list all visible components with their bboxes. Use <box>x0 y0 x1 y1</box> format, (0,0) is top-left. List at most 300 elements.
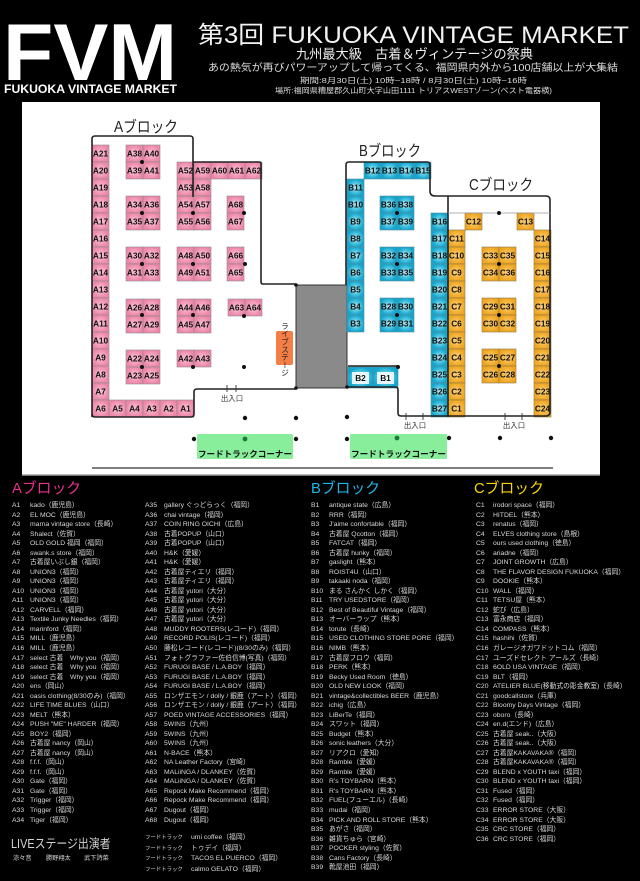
block B booths: B20 <box>432 285 447 295</box>
shop list C1-C36: ELVES clothing store（島根） <box>493 531 584 538</box>
block A booths: A23 <box>127 371 142 381</box>
block B booths: B1 <box>380 373 391 383</box>
shop list A1-A34: Trigger（福岡） <box>30 797 78 804</box>
block C booths: C9 <box>451 268 462 278</box>
block C booths: C27 <box>500 353 515 363</box>
shop list A1-A34: A5 <box>12 540 20 547</box>
shop list B1-B39: B8 <box>311 569 319 576</box>
block B booths: B21 <box>432 302 447 312</box>
shop list C1-C36: oboro（長崎） <box>493 712 538 719</box>
food truck list: トゥデイ（福岡） <box>191 845 245 852</box>
shop list B1-B39: B7 <box>311 559 319 566</box>
block A booths: A20 <box>93 166 108 176</box>
block C booths: C23 <box>535 387 550 397</box>
block C booths: C25 <box>483 353 498 363</box>
block A booths: A37 <box>144 217 159 227</box>
food truck list: フードトラック <box>145 835 183 841</box>
shop list A35-A68: A59 <box>145 731 157 738</box>
shop list B1-B39: R's TOYBARN（熊本） <box>329 788 400 795</box>
shop list B1-B39: リアクロ（愛知） <box>329 750 383 757</box>
block A booths: A26 <box>127 303 142 313</box>
block A booths: A59 <box>195 166 210 176</box>
food truck list: フードトラック <box>145 867 183 873</box>
block C booths: C22 <box>535 370 550 380</box>
shop list A1-A34: A23 <box>12 712 24 719</box>
shop list A1-A34: CARVELL（福岡） <box>30 607 88 614</box>
block B booths: B4 <box>350 302 361 312</box>
shop list B1-B39: USED CLOTHING STORE PORE（福岡） <box>329 635 458 642</box>
shop list A1-A34: A7 <box>12 559 20 566</box>
shop list A1-A34: A28 <box>12 759 24 766</box>
food truck list <box>145 833 282 873</box>
block C booths: C18 <box>535 302 550 312</box>
block A booths: A7 <box>95 387 106 397</box>
shop list B1-B39: takaaki noda（福岡） <box>329 578 395 585</box>
shop list A35-A68: A52 <box>145 664 157 671</box>
shop list A35-A68: 古着POPUP（山口） <box>164 531 229 538</box>
shop list C1-C36: Bloomy Days Vintage（福岡） <box>493 702 585 709</box>
block A booths: A51 <box>195 268 210 278</box>
shop list B1-B39 <box>311 501 458 871</box>
shop list A35-A68: Dugout（福岡） <box>164 807 213 814</box>
block A booths: A29 <box>144 320 159 330</box>
live stage performers: 勝野翔太 <box>46 855 71 862</box>
shop list B1-B39: B22 <box>311 702 323 709</box>
block A booths: A65 <box>228 268 243 278</box>
dates: 期間:8月30日(土) 10時~18時 / 8月30日(土) 10時~16時 <box>300 75 527 85</box>
shop list A1-A34: oasis clothing(8/30のみ)（福岡） <box>30 693 130 700</box>
shop list C1-C36: C18 <box>476 664 488 671</box>
shop list B1-B39: B21 <box>311 693 323 700</box>
shop list B1-B39: vintage&collectibles BEER（鹿児島） <box>329 693 443 700</box>
block B booths: B18 <box>432 251 447 261</box>
shop list C1-C36: irodori space（福岡） <box>493 502 559 509</box>
food truck corner left <box>197 434 293 459</box>
block B booths: B38 <box>398 200 413 210</box>
shop list A35-A68: A62 <box>145 759 157 766</box>
block A booths: A60 <box>212 166 227 176</box>
food truck list: calmo GELATO（福岡） <box>191 866 265 873</box>
block A booths: A33 <box>144 268 159 278</box>
shop list B1-B39: B27 <box>311 750 323 757</box>
block B booths: B24 <box>432 353 447 363</box>
shop list A1-A34: A11 <box>12 597 24 604</box>
shop list B1-B39: Ramble（愛媛） <box>329 759 380 766</box>
food truck list: フードトラック <box>145 856 183 862</box>
shop list A1-A34: A18 <box>12 664 24 671</box>
shop list C1-C36: C12 <box>476 607 488 614</box>
shop list A1-A34: Gate（福岡） <box>30 788 72 795</box>
shop list A35-A68: COIN RING OICHI（広島） <box>164 521 248 528</box>
block C booths <box>448 213 551 417</box>
entrance 3: 出入口 <box>503 421 525 430</box>
block A booths: A3 <box>146 404 157 414</box>
shop list A35-A68: A65 <box>145 788 157 795</box>
block A booths: A50 <box>195 251 210 261</box>
shop list A1-A34: MELT（熊本） <box>30 712 75 719</box>
entrance 1: 出入口 <box>221 394 243 403</box>
event header <box>3 8 629 98</box>
shop list C1-C36: 古着屋KAKAVAKA®（福岡） <box>493 759 581 766</box>
food truck corner left: フードトラックコーナー <box>198 449 292 459</box>
shop list A35-A68: A66 <box>145 797 157 804</box>
shop list A35-A68: 5WINS（九州） <box>164 740 213 747</box>
shop list A1-A34: A32 <box>12 797 24 804</box>
shop list A1-A34: A33 <box>12 807 24 814</box>
shop list B1-B39: NIMB（熊本） <box>329 645 373 652</box>
block A booths: A32 <box>144 251 159 261</box>
shop list A35-A68: A40 <box>145 550 157 557</box>
shop list B1-B39: torute（長崎） <box>329 626 374 633</box>
block B booths: B8 <box>350 234 361 244</box>
shop list A35-A68: 5WINS（九州） <box>164 721 213 728</box>
shop list B1-B39: FATCAT（福岡） <box>329 540 381 547</box>
shop list A35-A68: 古着屋ティエリ（福岡） <box>164 569 238 576</box>
block C heading: Cブロック <box>469 175 533 194</box>
shop list A35-A68: FURUGI BASE / L.A.BOY（福岡） <box>164 664 269 671</box>
block A booths: A21 <box>93 149 108 159</box>
shop list B1-B39: ROIST4U（山口） <box>329 569 386 576</box>
shop list B1-B39: B4 <box>311 531 319 538</box>
shop list B1-B39: B39 <box>311 864 323 871</box>
shop list B1-B39: B29 <box>311 769 323 776</box>
shop list A35-A68: 古着屋 yutori（大分） <box>164 597 230 604</box>
shop list B1-B39: B5 <box>311 540 319 547</box>
food truck corner right: フードトラックコーナー <box>351 449 446 459</box>
shop list A35-A68: A50 <box>145 645 157 652</box>
block A booths: A16 <box>93 234 108 244</box>
block C booths: C19 <box>535 319 550 329</box>
shop list A35-A68: A49 <box>145 635 157 642</box>
block C booths: C6 <box>451 319 462 329</box>
shop list C1-C36: C2 <box>476 512 485 519</box>
shop list A1-A34: ens（岡山） <box>30 683 68 690</box>
shop list A1-A34: A27 <box>12 750 24 757</box>
shop list A35-A68: A48 <box>145 626 157 633</box>
shop list A1-A34: A3 <box>12 521 20 528</box>
block B booths: B15 <box>415 166 431 176</box>
block C booths: C2 <box>451 387 462 397</box>
logo: FVM: FUKUOKA VINTAGE MARKET <box>4 82 178 96</box>
shop list A1-A34: f.f.f.（岡山） <box>30 769 69 776</box>
shop list A35-A68: gallery ぐっどらっく（福岡） <box>164 502 254 509</box>
shop list A1-A34: A31 <box>12 788 24 795</box>
block A booths: A43 <box>195 354 210 364</box>
block C booths: C15 <box>535 251 550 261</box>
shop list C1-C36: WALL（福岡） <box>493 588 538 595</box>
shop list B1-B39: B24 <box>311 721 323 728</box>
shop list A35-A68: A43 <box>145 578 157 585</box>
shop list A35-A68: H&K（愛媛） <box>164 550 205 557</box>
shop list A35-A68: A35 <box>145 502 157 509</box>
block C booths: C31 <box>500 302 515 312</box>
shop list C1-C36: BLT（福岡） <box>493 674 532 681</box>
shop list B1-B39: B9 <box>311 578 319 585</box>
shop list C1-C36: C1 <box>476 502 485 509</box>
block A booths: A63 <box>229 303 244 313</box>
block A booths: A15 <box>93 251 108 261</box>
block A booths: A22 <box>127 354 142 364</box>
shop list A35-A68: RECORD POLIS(レコード)（福岡） <box>164 635 274 642</box>
shop list A35-A68: N-BACE（熊本） <box>164 750 217 757</box>
block A booths: A42 <box>178 354 193 364</box>
shop list B1-B39: Budget（熊本） <box>329 731 378 738</box>
shop list B1-B39: B28 <box>311 759 323 766</box>
shop list A35-A68: A67 <box>145 807 157 814</box>
shop list B1-B39: TRY USEDSTORE（福岡） <box>329 597 414 604</box>
shop list A35-A68: Repock Make Recommend（福岡） <box>164 788 273 795</box>
block A booths: A28 <box>144 303 159 313</box>
entrance 2: 出入口 <box>404 421 426 430</box>
shop list A1-A34: EL MOC（鹿児島） <box>30 512 90 519</box>
shop list B1-B39: B31 <box>311 788 323 795</box>
shop list B1-B39: R's TOYBARN（熊本） <box>329 778 400 785</box>
block C booths: C35 <box>500 251 515 261</box>
shop list C1-C36: C28 <box>476 759 488 766</box>
shop list C1-C36: C13 <box>476 616 488 623</box>
shop list A35-A68: chai vintage（福岡） <box>164 512 227 519</box>
shop list A35-A68: フォトグラファー佐伯信博(写真)（福岡） <box>164 654 291 662</box>
shop list C1-C36: C11 <box>476 597 488 604</box>
shop list A1-A34: A6 <box>12 550 20 557</box>
shop list A1-A34: BOY2（福岡） <box>30 731 75 738</box>
shop list A35-A68: MALiiNGA / DLANKEY（佐賀） <box>164 769 260 776</box>
block C booths: C1 <box>451 404 462 414</box>
shop list C1-C36: C30 <box>476 778 488 785</box>
block A booths: A48 <box>178 251 193 261</box>
block A booths: A40 <box>144 149 159 159</box>
block C booths: C33 <box>483 251 498 261</box>
shop list C1-C36: C34 <box>476 817 488 824</box>
shop list C1-C36: C32 <box>476 797 488 804</box>
food truck list: TACOS EL PUERCO（福岡） <box>191 855 282 862</box>
block C booths: C16 <box>535 268 550 278</box>
block A booths: A12 <box>93 302 108 312</box>
shop list A1-A34: A16 <box>12 645 24 652</box>
block C booths: C36 <box>500 268 515 278</box>
shop list B1-B39: 古着屋 hunky（福岡） <box>329 550 397 557</box>
shop list C1-C36: C22 <box>476 702 488 709</box>
live stage <box>276 322 293 377</box>
shop list A1-A34: Trigger（福岡） <box>30 807 78 814</box>
shop list C1-C36: C20 <box>476 683 488 690</box>
shop list A35-A68: 5WINS（九州） <box>164 731 213 738</box>
shop list A1-A34: 古着屋 nancy（岡山） <box>30 750 98 757</box>
shop list A1-A34: A17 <box>12 654 24 662</box>
block C booths: C11 <box>449 234 464 244</box>
block B heading: Bブロック <box>359 141 421 160</box>
shop list A35-A68: A57 <box>145 712 157 719</box>
block A booths: A53 <box>178 183 193 193</box>
shop list A1-A34: swank.s store（福岡） <box>30 550 99 557</box>
block C booths: C17 <box>535 285 550 295</box>
shop list A35-A68: POED VINTAGE ACCESSORIES（福岡） <box>164 712 292 719</box>
shop list B1-B39: 古着屋 Qcotton（福岡） <box>329 531 402 538</box>
block C booths: C28 <box>500 370 515 380</box>
shop list A35-A68: 古着屋 yutori（大分） <box>164 607 230 614</box>
block A booths: A14 <box>93 268 108 278</box>
shop list C1-C36: goodcallstore（兵庫） <box>493 693 561 700</box>
shop list A35-A68: A64 <box>145 778 157 785</box>
shop list A35-A68: 藤松レコード(レコード)(8/30のみ)（福岡） <box>164 645 295 652</box>
shop list A35-A68: A54 <box>145 683 157 690</box>
subtitle: 九州最大級 古着＆ヴィンテージの祭典 <box>296 46 533 62</box>
tagline: あの熱気が再びパワーアップして帰ってくる、福岡県内外から100店舗以上が大集結 <box>208 61 618 74</box>
entrance 1 <box>221 385 243 403</box>
block A booths: A49 <box>178 268 193 278</box>
live stage performers: 武下詩菜 <box>84 855 109 862</box>
block C booths: C24 <box>535 404 550 414</box>
shop list C1-C36: Fused（福岡） <box>493 797 539 804</box>
block A booths: A46 <box>195 303 210 313</box>
block A booths: A2 <box>163 404 174 414</box>
shop list A1-A34: Gate（福岡） <box>30 778 72 785</box>
shop list B1-B39: B26 <box>311 740 323 747</box>
shop list C1-C36: 古着屋 seak..（大阪） <box>493 731 561 738</box>
block B booths: B25 <box>432 370 447 380</box>
shop list B1-B39: Best of Beautiful Vintage（福岡） <box>329 607 431 614</box>
block A booths: A30 <box>127 251 142 261</box>
shop list A1-A34: A20 <box>12 683 24 690</box>
shop list A35-A68: A36 <box>145 512 157 519</box>
shop list C1-C36: CRC STORE（福岡） <box>493 826 560 833</box>
shop list A1-A34: A15 <box>12 635 24 642</box>
block B booths: B26 <box>432 387 447 397</box>
shop list C1-C36: 富永商店（福岡） <box>493 616 547 623</box>
shop list C1-C36: ERROR STORE（大阪） <box>493 817 570 824</box>
block A booths: A27 <box>127 320 142 330</box>
shop list C1-C36: C14 <box>476 626 488 633</box>
block B booths: B22 <box>432 319 447 329</box>
shop list C1-C36: Fused（福岡） <box>493 788 539 795</box>
block A booths: A34 <box>127 200 142 210</box>
shop list A1-A34: A4 <box>12 531 20 538</box>
shop list B1-B39: Ramble（愛媛） <box>329 769 380 776</box>
shop list B1-B39: B6 <box>311 550 319 557</box>
shop list A1-A34: UNION3（福岡） <box>30 588 83 595</box>
shop list C1-C36: ATELIER BLUE(移動式の彫金教室)（長崎） <box>493 683 627 690</box>
heading: B block list: Bブロック <box>311 481 380 497</box>
shop list A1-A34: A24 <box>12 721 24 728</box>
block A booths: A36 <box>144 200 159 210</box>
shop list A1-A34: select 古着 Why you（福岡） <box>30 674 124 681</box>
block B booths: B17 <box>432 234 447 244</box>
shop list C1-C36: C16 <box>476 645 488 652</box>
shop list B1-B39: B14 <box>311 626 323 633</box>
shop list A1-A34: 古着屋 nancy（岡山） <box>30 740 98 747</box>
block A booths: A9 <box>95 353 106 363</box>
shop list B1-B39: B37 <box>311 845 323 852</box>
block B booths: B39 <box>398 217 413 227</box>
shop list B1-B39: B18 <box>311 664 323 671</box>
shop list B1-B39: B12 <box>311 607 323 614</box>
block A booths: A64 <box>246 303 261 313</box>
block C booths: C12 <box>466 217 481 227</box>
shop list C1-C36: C27 <box>476 750 488 757</box>
shop list B1-B39: B19 <box>311 674 323 681</box>
shop list A35-A68: A41 <box>145 559 157 566</box>
block A booths: A13 <box>93 285 108 295</box>
block A booths: A55 <box>178 217 193 227</box>
venue map panel <box>22 102 600 476</box>
block B booths: B37 <box>381 217 396 227</box>
shop list A1-A34: marinford（福岡） <box>30 626 86 633</box>
block C booths: C26 <box>483 370 498 380</box>
block B booths: B34 <box>398 251 413 261</box>
shop list A35-A68: A38 <box>145 531 157 538</box>
block B booths: B3 <box>350 319 361 329</box>
block A booths: A68 <box>228 200 243 210</box>
block C booths: C5 <box>451 336 462 346</box>
shop list B1-B39: B16 <box>311 645 323 652</box>
block A booths: A38 <box>127 149 142 159</box>
shop list B1-B39: FUEL(フューエル)（長崎） <box>329 797 412 804</box>
block A booths: A6 <box>95 404 106 414</box>
block C booths: C8 <box>451 285 462 295</box>
block B booths: B2 <box>355 373 366 383</box>
block B booths: B29 <box>381 319 396 329</box>
shop list A35-A68: NA Leather Factory（宮崎） <box>164 759 250 766</box>
shop list C1-C36: C24 <box>476 721 488 728</box>
shop list B1-B39: sonic leathers（大分） <box>329 740 398 747</box>
shop list A1-A34: A29 <box>12 769 24 776</box>
shop list A35-A68: FURUGI BASE / L.A.BOY（福岡） <box>164 674 269 681</box>
shop list C1-C36: C8 <box>476 569 485 576</box>
heading: A block list: Aブロック <box>12 481 81 497</box>
block B booths: B12 <box>365 166 380 176</box>
shop list C1-C36: C17 <box>476 654 488 662</box>
block C booths: C30 <box>483 319 498 329</box>
shop list C1-C36: C4 <box>476 531 485 538</box>
shop list A1-A34: UNION3（福岡） <box>30 597 83 604</box>
block A booths: A66 <box>228 251 243 261</box>
shop list B1-B39: B1 <box>311 502 319 509</box>
shop list C1-C36: C7 <box>476 559 485 566</box>
shop list A35-A68: A44 <box>145 588 157 595</box>
shop list C1-C36: C21 <box>476 693 488 700</box>
block A booths: A44 <box>178 303 193 313</box>
shop list B1-B39: B17 <box>311 654 323 662</box>
shop list A1-A34: A8 <box>12 569 20 576</box>
shop list A1-A34: A26 <box>12 740 24 747</box>
block C booths: C32 <box>500 319 515 329</box>
block B booths: B36 <box>381 200 396 210</box>
block A booths: A67 <box>228 217 243 227</box>
shop list A35-A68: A46 <box>145 607 157 614</box>
shop list B1-B39: POCKER styling（佐賀） <box>329 845 406 852</box>
shop list B1-B39: あがさ（福岡） <box>329 826 377 833</box>
shop list B1-B39: B36 <box>311 836 323 843</box>
block B booths: B6 <box>350 268 361 278</box>
block A booths: A1 <box>180 404 191 414</box>
block A booths: A10 <box>93 336 108 346</box>
shop list A1-A34: A2 <box>12 512 20 519</box>
shop list C1-C36: C3 <box>476 521 485 528</box>
shop list C1-C36: C10 <box>476 588 488 595</box>
block B booths: B10 <box>348 200 363 210</box>
shop list C1-C36: 古着屋KAKAVAKA®（福岡） <box>493 750 581 757</box>
shop list A1-A34: A1 <box>12 502 20 509</box>
shop list A35-A68 <box>145 501 301 824</box>
block A booths <box>92 145 262 417</box>
stage / gray building <box>296 285 347 388</box>
shop list B1-B39: B15 <box>311 635 323 642</box>
block A booths: A41 <box>144 166 159 176</box>
block A booths: A47 <box>195 320 210 330</box>
block B booths: B13 <box>382 166 397 176</box>
shop list A35-A68: A47 <box>145 616 157 623</box>
shop list C1-C36: THE FLAVOR DESIGN FUKUOKA（福岡） <box>493 569 625 576</box>
